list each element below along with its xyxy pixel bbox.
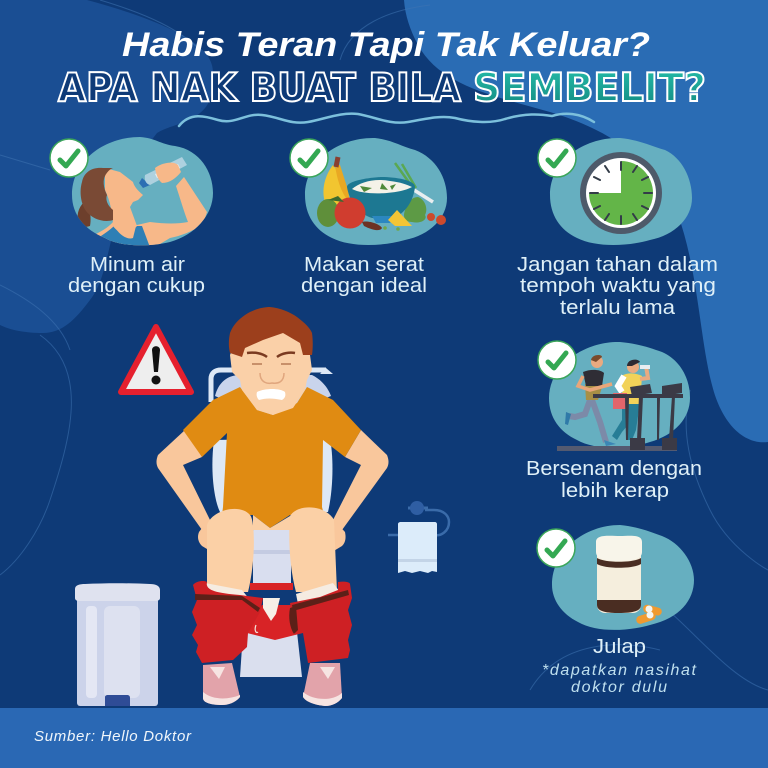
label: Bersenam dengan bbox=[526, 458, 702, 480]
icon: check badge bbox=[538, 139, 576, 177]
heading line 1: Habis Teran Tapi Tak Keluar? bbox=[122, 26, 650, 64]
icon: check badge bbox=[50, 139, 88, 177]
footer bbox=[0, 708, 768, 768]
shirt bbox=[183, 387, 361, 528]
panel: laxative bbox=[537, 525, 697, 696]
label: Minum air bbox=[90, 254, 185, 276]
toilet bbox=[211, 368, 333, 677]
panel: fibre bbox=[290, 138, 447, 297]
icon: check badge bbox=[538, 341, 576, 379]
illustration: man on toilet bbox=[156, 307, 388, 706]
heading highlight: SEMBELIT? bbox=[473, 66, 706, 111]
shoes bbox=[203, 663, 342, 706]
label: *dapatkan nasihat bbox=[542, 662, 697, 679]
panel: drink water bbox=[50, 137, 213, 297]
label bbox=[542, 636, 697, 696]
label: dengan cukup bbox=[68, 275, 205, 297]
icon: medicine bottle bbox=[552, 525, 694, 630]
label: dengan ideal bbox=[301, 275, 427, 297]
label: doktor dulu bbox=[571, 679, 667, 696]
label: terlalu lama bbox=[560, 297, 676, 319]
title bbox=[58, 26, 706, 126]
label: Makan serat bbox=[304, 254, 424, 276]
pants bbox=[192, 581, 352, 663]
source: Sumber: Hello Doktor bbox=[34, 728, 192, 745]
icon: clock bbox=[550, 138, 692, 245]
icon: check badge bbox=[537, 529, 575, 567]
icon: woman drinking bbox=[72, 137, 213, 250]
arms bbox=[156, 430, 388, 552]
legs bbox=[207, 507, 337, 592]
panel: time bbox=[517, 138, 718, 319]
label bbox=[301, 254, 427, 297]
icon: fibre foods bbox=[305, 138, 447, 245]
label: tempoh waktu yang bbox=[520, 275, 716, 297]
label: Jangan tahan dalam bbox=[517, 254, 718, 276]
wavy underline bbox=[179, 114, 594, 126]
panel: exercise bbox=[526, 341, 702, 502]
label bbox=[517, 254, 718, 319]
illustration: toilet paper bbox=[388, 501, 449, 573]
icon: treadmill runners bbox=[549, 342, 690, 451]
label: lebih kerap bbox=[561, 480, 669, 502]
head bbox=[229, 307, 313, 415]
icon: check badge bbox=[290, 139, 328, 177]
icon: warning triangle bbox=[121, 327, 191, 392]
heading line 2 outlined: APA NAK BUAT BILA bbox=[58, 66, 461, 111]
label bbox=[68, 254, 205, 297]
illustration: rubbish bin bbox=[75, 583, 160, 706]
label: Julap bbox=[593, 636, 646, 658]
label bbox=[526, 458, 702, 502]
